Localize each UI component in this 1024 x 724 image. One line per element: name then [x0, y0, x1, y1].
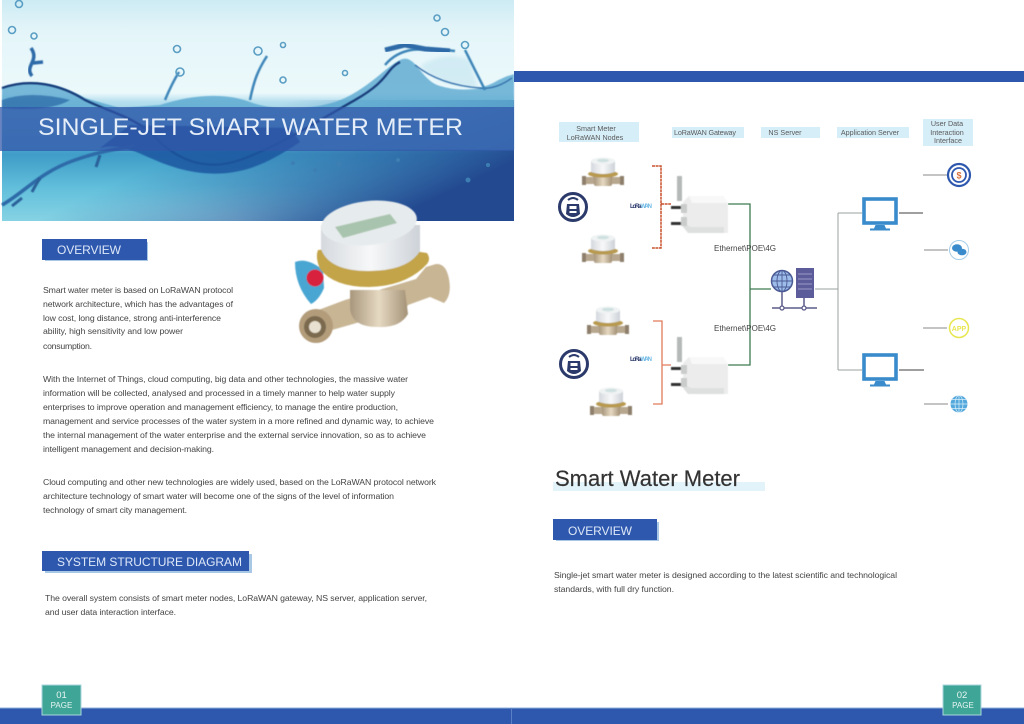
icon: web globe — [950, 396, 968, 412]
page badge 01: 01 — [56, 690, 67, 701]
page badge 01: PAGE — [51, 701, 72, 710]
label: NS server — [761, 127, 820, 138]
water meter photo — [295, 196, 450, 343]
gateway top — [671, 176, 728, 233]
text block: intro paragraph: consumption. — [43, 341, 92, 351]
text block: right page description — [554, 570, 897, 594]
text block: cloud computing paragraph — [43, 477, 437, 515]
gateway bottom — [671, 337, 728, 394]
heading: system structure diagram: SYSTEM STRUCTURE DIAGRAM — [57, 555, 242, 569]
label: smart meter nodes: LoRaWAN Nodes — [567, 133, 624, 142]
text block: cloud computing paragraph: architecture technology of smart water will become one of the signs of the level of information — [43, 491, 394, 501]
icon: payment — [948, 164, 970, 186]
text block: internet of things paragraph: With the Internet of Things, cloud computing, big data and other technologies, the massive water — [43, 374, 408, 384]
icon: wechat — [950, 240, 968, 260]
page badge 02: 02 — [957, 690, 967, 701]
label: application server — [837, 127, 909, 138]
label: user data interface: Interface — [934, 136, 962, 145]
heading: overview — [42, 239, 148, 261]
label: user data interface: Interaction — [930, 128, 964, 137]
label: user data interface: User Data — [931, 119, 963, 128]
heading: overview right page — [553, 519, 659, 541]
label: gateway: LoRaWAN Gateway — [674, 128, 736, 137]
heading: smart water meter: Smart Water Meter — [555, 466, 740, 491]
heading: overview: OVERVIEW — [57, 243, 122, 257]
text block: internet of things paragraph — [43, 374, 434, 454]
icon: app: APP — [952, 326, 967, 333]
page badge 01 — [42, 685, 81, 715]
text block: system description — [45, 593, 427, 617]
text block: intro paragraph: low cost, long distance, strong anti-interference — [43, 313, 221, 323]
icon: payment: $ — [956, 170, 962, 180]
system diagram — [559, 119, 973, 416]
text block: internet of things paragraph: management and service processes of the water system in a more refined and dynamic way, to achieve — [43, 416, 434, 426]
text block: intro paragraph: ability, high sensitivity and low power — [43, 326, 183, 336]
text block: cloud computing paragraph: technology of smart city management. — [43, 505, 187, 515]
label: smart meter nodes: Smart Meter — [576, 124, 616, 133]
label: application server: Application Server — [841, 128, 900, 137]
heading: overview right page: OVERVIEW — [568, 524, 633, 538]
text block: intro paragraph: network architecture, which has the advantages of — [43, 299, 234, 309]
meters top group — [582, 158, 624, 263]
title: SINGLE-JET SMART WATER METER — [38, 115, 463, 141]
text block: internet of things paragraph: the internal management of the water enterprise and the external service innovation, so as to achieve — [43, 430, 426, 440]
icon: badge bottom — [560, 350, 588, 378]
LoRa logo top: LoRaWAN — [630, 204, 652, 210]
icon: NS server globe and rack — [772, 268, 817, 310]
network label bottom: Ethernet\POE\4G — [714, 324, 776, 333]
connectors — [652, 166, 948, 404]
icon: app — [950, 318, 968, 338]
page badge 02: PAGE — [952, 701, 974, 710]
text block: system description: The overall system consists of smart meter nodes, LoRaWAN gateway, NS server, application server, — [45, 593, 427, 603]
text block: internet of things paragraph: enterprises to improve operation and management efficiency, to manage the entire production, — [43, 402, 398, 412]
top blue bar right page — [514, 71, 1024, 82]
heading: system structure diagram — [42, 551, 252, 573]
icon: badge top — [560, 194, 586, 220]
text block: intro paragraph — [43, 285, 234, 351]
icon: monitor bottom — [864, 355, 896, 386]
text block: right page description: Single-jet smart water meter is designed according to the latest scientific and technological — [554, 570, 897, 580]
text block: right page description: standards, with full dry function. — [554, 584, 674, 594]
meters bottom group — [587, 306, 632, 416]
page badge 02 — [943, 685, 981, 715]
label: user data interface — [923, 119, 973, 146]
text block: system description: and user data interaction interface. — [45, 607, 176, 617]
label: smart meter nodes — [559, 122, 639, 142]
icon: monitor top — [864, 199, 896, 230]
label: NS server: NS Server — [768, 128, 802, 137]
LoRa logo bottom: LoRaWAN — [630, 357, 652, 363]
text block: internet of things paragraph: information will be collected, analysed and processed in a timely manner to help water supply — [43, 388, 396, 398]
text block: internet of things paragraph: intelligent management and decision-making. — [43, 444, 214, 454]
footer bar — [0, 708, 1024, 724]
text block: intro paragraph: Smart water meter is based on LoRaWAN protocol — [43, 285, 233, 295]
text block: cloud computing paragraph: Cloud computing and other new technologies are widely used, based on the LoRaWAN protocol network — [43, 477, 437, 487]
hero banner with water image — [0, 0, 514, 221]
network label top: Ethernet\POE\4G — [714, 244, 776, 253]
